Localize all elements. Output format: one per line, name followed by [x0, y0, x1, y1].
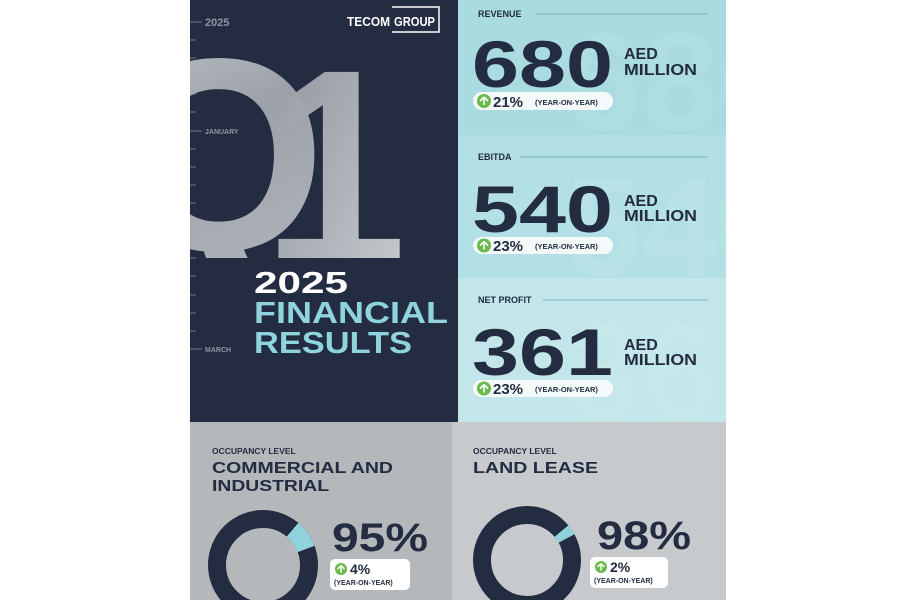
- panel: net profit: 23%: [493, 381, 523, 398]
- panel: ebitda: EBITDA: [478, 152, 512, 162]
- panel: net profit: NET PROFIT: [478, 295, 532, 305]
- panel: commercial occupancy: INDUSTRIAL: [212, 478, 329, 495]
- panel: net profit: 361: [565, 293, 795, 450]
- panel: ebitda: [458, 135, 726, 278]
- panel: revenue: 680: [565, 3, 795, 160]
- panel: land lease occupancy: [452, 422, 726, 600]
- donut: [217, 519, 309, 600]
- panel: net profit: (YEAR-ON-YEAR): [535, 385, 598, 394]
- ruler labels: [205, 18, 238, 352]
- title text: [255, 272, 447, 354]
- panel: net profit: 361: [472, 315, 613, 389]
- panel: revenue: 680: [472, 27, 613, 101]
- panel: net profit: AED: [624, 337, 658, 354]
- panel: revenue: [458, 0, 726, 135]
- panel: revenue: REVENUE: [478, 9, 522, 19]
- title text: FINANCIAL: [254, 295, 448, 330]
- panel: land lease occupancy: OCCUPANCY LEVEL: [473, 446, 557, 456]
- panel: land lease occupancy: (YEAR-ON-YEAR): [594, 578, 653, 585]
- title text: RESULTS: [254, 325, 412, 360]
- panel: commercial occupancy: 95%: [332, 516, 428, 560]
- panel: net profit: MILLION: [624, 352, 697, 369]
- panel: ebitda: (YEAR-ON-YEAR): [535, 242, 598, 251]
- big Q1: [190, 58, 400, 258]
- panel: commercial occupancy: (YEAR-ON-YEAR): [334, 580, 393, 587]
- panel: ebitda: 540: [472, 172, 613, 246]
- panel: revenue: MILLION: [624, 62, 697, 79]
- ruler: [190, 22, 202, 349]
- panel: commercial occupancy: COMMERCIAL AND: [212, 460, 393, 477]
- ruler labels: 2025: [205, 17, 229, 29]
- ruler labels: FEBRUARY: [205, 238, 244, 245]
- ruler labels: JANUARY: [205, 129, 239, 136]
- panel: land lease occupancy: LAND LEASE: [473, 460, 598, 477]
- panel: net profit: [458, 278, 726, 422]
- donut: [482, 515, 572, 600]
- panel: revenue: AED: [624, 46, 658, 63]
- panel: ebitda: 540: [565, 148, 795, 305]
- logo: TECOM: [347, 15, 390, 29]
- logo: [347, 7, 439, 32]
- panel: land lease occupancy: 98%: [597, 514, 691, 558]
- panel: revenue: 21%: [493, 94, 523, 111]
- big Q1: Q: [112, 2, 326, 309]
- panel: ebitda: MILLION: [624, 208, 697, 225]
- big Q1: 1: [262, 11, 407, 329]
- ruler labels: MARCH: [205, 347, 231, 354]
- panel: ebitda: AED: [624, 193, 658, 210]
- logo: GROUP: [394, 15, 435, 29]
- panel: land lease occupancy: 2%: [610, 559, 631, 575]
- panel: ebitda: 23%: [493, 238, 523, 255]
- panel: commercial occupancy: 4%: [350, 561, 371, 577]
- panel: revenue: (YEAR-ON-YEAR): [535, 98, 598, 107]
- panel: commercial occupancy: [190, 422, 452, 600]
- panel: commercial occupancy: OCCUPANCY LEVEL: [212, 446, 296, 456]
- panel: title: [190, 0, 458, 422]
- title text: 2025: [254, 265, 348, 300]
